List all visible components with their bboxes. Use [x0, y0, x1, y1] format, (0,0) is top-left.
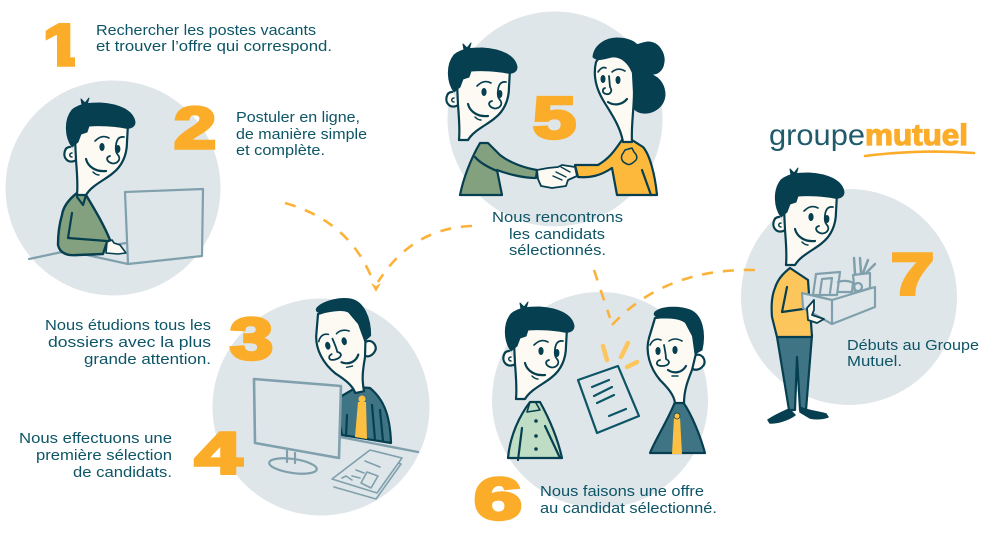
- text: step 3: dossiers avec la plus: [48, 335, 211, 351]
- text: step 3: Nous étudions tous les: [45, 318, 211, 334]
- logo: Groupe Mutuel: groupe: [769, 119, 865, 152]
- text: step 1: et trouver l’offre qui correspond.: [96, 39, 332, 55]
- text: step 6: [540, 484, 717, 517]
- panel: step 7 circle: [741, 189, 957, 405]
- text: step 1: [96, 23, 332, 55]
- illustration: candidate at laptop: [29, 98, 203, 264]
- panel: step 6 circle: [492, 292, 708, 508]
- recruiter: [648, 307, 705, 454]
- text: step 7: [847, 338, 979, 370]
- text: step 3: [45, 318, 211, 368]
- candidate: [503, 302, 574, 460]
- arrow: dashed path from step 2 to step 3: [285, 203, 374, 284]
- text: step 4: de candidats.: [73, 465, 172, 481]
- panel: step 5 circle: [448, 12, 662, 226]
- offer document: [578, 366, 639, 433]
- text: step 4: [19, 431, 172, 481]
- text: step 6: Nous faisons une offre: [540, 484, 704, 500]
- number 5: 5: [533, 86, 576, 151]
- panel: step 2 circle: [6, 80, 220, 296]
- text: step 5: Nous rencontrons: [492, 210, 623, 226]
- text: step 7: Mutuel.: [847, 354, 902, 370]
- arrow: head pointing at step 3: [371, 283, 381, 292]
- illustration: two people and job offer: [503, 302, 705, 460]
- arrow: dashed path from step 5 to step 6: [594, 270, 610, 318]
- text: step 6: au candidat sélectionné.: [540, 501, 717, 517]
- text: step 1: Rechercher les postes vacants: [96, 23, 316, 39]
- number 2: 2: [174, 96, 216, 161]
- text: step 5: sélectionnés.: [509, 243, 606, 259]
- number 6: 6: [474, 467, 522, 532]
- illustration: new employee with box: [768, 168, 875, 423]
- logo: Groupe Mutuel: mutuel: [865, 119, 968, 152]
- number 3: 3: [230, 307, 273, 372]
- text: step 4: Nous effectuons une: [19, 431, 172, 447]
- arrow: dashed path from step 6 to step 7: [612, 270, 755, 325]
- woman on the right: [575, 38, 665, 195]
- number 4: 4: [195, 421, 242, 486]
- number 1: 1: [43, 13, 81, 78]
- logo: Groupe Mutuel: [769, 119, 974, 156]
- illustration: recruiter at computer: [254, 293, 418, 499]
- clasped hands: [537, 165, 577, 188]
- panel: step 3 and 4 circle: [212, 298, 430, 516]
- text: step 2: Postuler en ligne,: [236, 110, 360, 126]
- illustration: handshake between two people: [446, 38, 665, 195]
- text: step 3: grande attention.: [84, 352, 211, 368]
- arrow: dashed path from step 5 to step 3: [378, 226, 472, 282]
- text: step 2: de manière simple: [236, 127, 367, 143]
- text: step 4: première sélection: [36, 448, 172, 464]
- text: step 5: les candidats: [509, 227, 605, 243]
- man on the left: [446, 43, 537, 195]
- text: step 5: [492, 210, 623, 259]
- text: step 7: Débuts au Groupe: [847, 338, 979, 354]
- text: step 2: [236, 110, 367, 159]
- text: step 2: et complète.: [236, 143, 325, 159]
- sparks: [603, 343, 637, 367]
- number 7: 7: [891, 242, 934, 307]
